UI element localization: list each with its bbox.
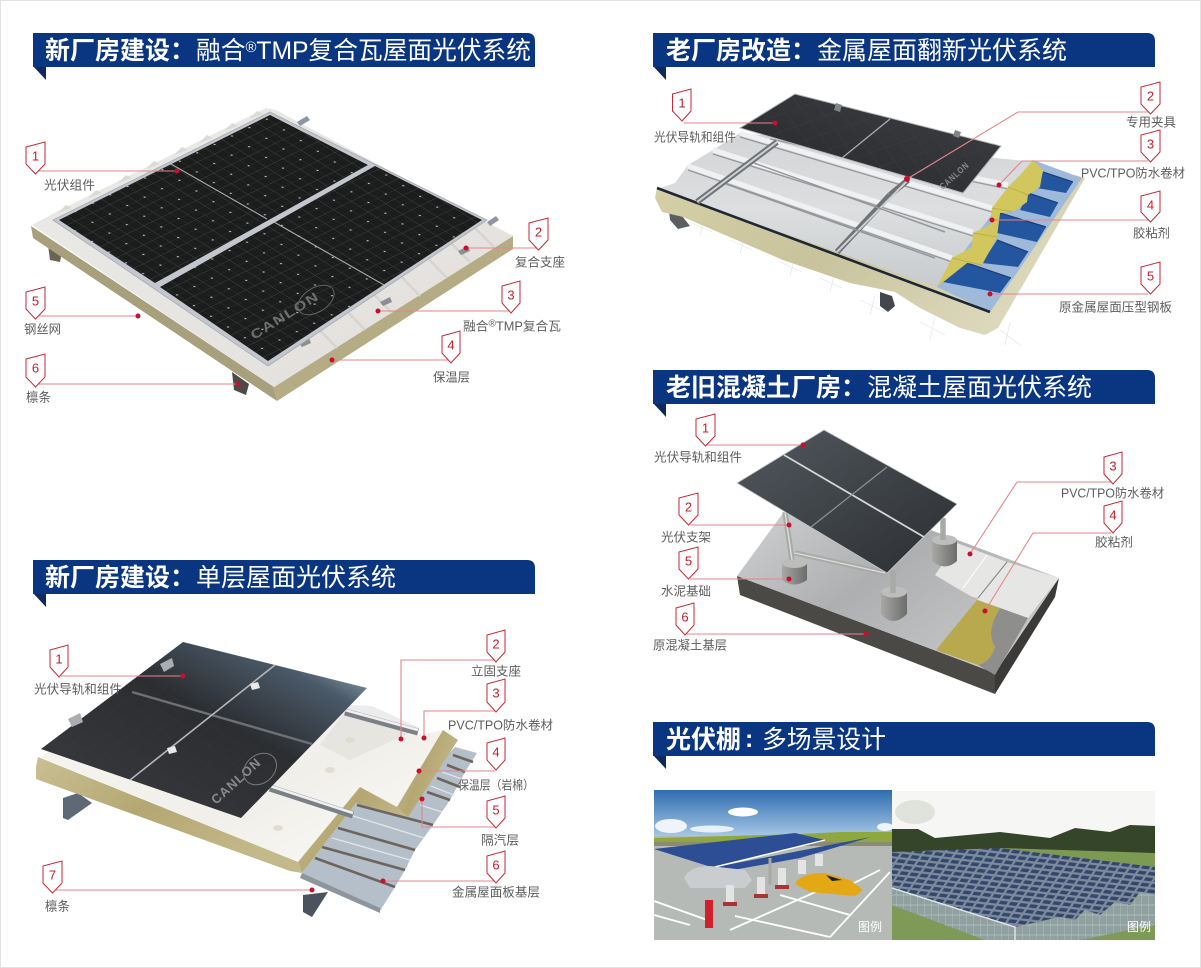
header: PV canopy scenes: 光伏棚 (666, 726, 741, 754)
callout 2: 复合支座: 2 (535, 224, 542, 240)
photo: solar carport: 图例 (858, 920, 882, 934)
roof diagram: composite tile with solar modules (31, 108, 513, 401)
callout 2: 光伏支架 (661, 493, 792, 544)
callout 6: 檩条: 檩条 (26, 390, 51, 404)
header: metal roof renovation: 老厂房改造： (666, 37, 816, 65)
callout 1: 光伏导轨和组件 (654, 414, 806, 464)
callout 2: 立固支座: 立固支座 (471, 664, 521, 678)
panel: PV canopy scenes (653, 722, 1155, 940)
callout 3: PVC/TPO防水卷材: 3 (1109, 458, 1117, 474)
panel: concrete roof (653, 370, 1164, 694)
header: TMP composite tile roof: TMP复合瓦屋面光伏系统 (256, 37, 531, 65)
callout 5: 隔汽层: 隔汽层 (481, 832, 519, 848)
callout 4: 胶粘剂: 胶粘剂 (1133, 226, 1170, 240)
callout 1: 光伏导轨和组件: 1 (55, 652, 63, 666)
header: TMP composite tile roof: 融合 (196, 37, 246, 65)
header: TMP composite tile roof (33, 33, 535, 80)
callout 5: 水泥基础: 水泥基础 (661, 584, 711, 598)
callout 1: 光伏导轨和组件 (34, 645, 186, 696)
roof diagram: metal roof retrofit (655, 94, 1085, 345)
callout 4: 胶粘剂 (990, 191, 1170, 240)
callout 3: PVC/TPO防水卷材 (422, 679, 553, 740)
callout 6: 金属屋面板基层: 金属屋面板基层 (452, 884, 540, 900)
roof diagram: composite tile with solar modules: CANLON (248, 288, 322, 343)
callout 1: 光伏导轨和组件: 光伏导轨和组件 (654, 130, 736, 144)
callout 1: 光伏组件: 1 (32, 148, 39, 164)
callout 3: PVC/TPO防水卷材: PVC/TPO防水卷材 (1061, 486, 1164, 500)
callout 3: 融合TMP复合瓦: 3 (507, 288, 515, 302)
header: concrete roof: 老旧混凝土厂房： (666, 374, 866, 402)
callout 2: 复合支座: 复合支座 (515, 254, 565, 270)
header: TMP composite tile roof: ® (245, 39, 256, 56)
callout 3: PVC/TPO防水卷材 (996, 130, 1185, 188)
callout 6: 原混凝土基层: 原混凝土基层 (653, 638, 727, 652)
callout 1: 光伏组件 (26, 142, 180, 192)
callout 7: 檩条 (43, 861, 314, 914)
header: PV canopy scenes: : (745, 725, 753, 753)
callout 1: 光伏导轨和组件: 光伏导轨和组件 (654, 450, 742, 464)
callout 7: 檩条: 7 (49, 868, 56, 882)
callout 4: 保温层（岩棉）: 4 (492, 744, 500, 760)
callout 4: 保温层（岩棉）: 保温层（岩棉） (458, 778, 534, 792)
callout 2: 立固支座 (398, 630, 521, 742)
header: concrete roof: 混凝土屋面光伏系统 (867, 374, 1092, 402)
callout 6: 檩条: 6 (32, 360, 39, 376)
callout 3: 融合TMP复合瓦: 融合 (463, 320, 488, 334)
roof diagram: single-layer membrane with rock wool (36, 642, 477, 917)
callout 6: 原混凝土基层: 6 (681, 610, 689, 624)
header: TMP composite tile roof: 新厂房建设： (45, 37, 195, 65)
callout 3: PVC/TPO防水卷材 (968, 452, 1164, 556)
callout 2: 立固支座: 2 (492, 636, 500, 652)
callout 3: 融合TMP复合瓦: TMP复合瓦 (496, 318, 561, 334)
callout 2: 光伏支架: 2 (685, 500, 692, 514)
callout 6: 檩条 (26, 354, 240, 404)
callout 6: 原混凝土基层 (653, 603, 868, 652)
callout 4: 胶粘剂: 4 (1109, 508, 1117, 522)
photo: solar greenhouse: 图例 (1127, 920, 1151, 934)
callout 3: PVC/TPO防水卷材: PVC/TPO防水卷材 (1081, 166, 1185, 180)
callout 5: 钢丝网 (24, 287, 140, 336)
callout 5: 隔汽层 (420, 796, 519, 848)
callout 2: 光伏支架: 光伏支架 (661, 530, 711, 544)
callout 1: 光伏导轨和组件: 1 (678, 96, 686, 110)
header: PV canopy scenes: 多场景设计 (762, 726, 886, 754)
panel: TMP composite tile roof (24, 33, 565, 404)
callout 5: 原金属屋面压型钢板: 原金属屋面压型钢板 (1059, 300, 1172, 314)
callout 4: 胶粘剂: 4 (1147, 198, 1154, 212)
callout 3: PVC/TPO防水卷材: 3 (1147, 136, 1154, 152)
callout 3: 融合TMP复合瓦 (376, 281, 561, 334)
callout 4: 保温层: 4 (447, 338, 455, 352)
callout 4: 保温层（岩棉） (416, 738, 534, 792)
callout 2: 专用夹具: 专用夹具 (1126, 114, 1176, 130)
header: PV canopy scenes (653, 722, 1155, 769)
callout 3: PVC/TPO防水卷材: PVC/TPO防水卷材 (448, 718, 553, 732)
callout 7: 檩条: 檩条 (45, 898, 70, 914)
callout 4: 胶粘剂 (982, 501, 1133, 614)
callout 5: 水泥基础 (661, 547, 792, 598)
callout 1: 光伏组件: 光伏组件 (44, 178, 95, 192)
roof diagram: single-layer membrane with rock wool: CANLON (208, 755, 264, 807)
callout 1: 光伏导轨和组件: 光伏导轨和组件 (34, 682, 122, 696)
roof diagram: concrete base with tilted solar array (737, 430, 1059, 694)
header: single-layer roof (33, 560, 535, 607)
header: concrete roof (653, 370, 1155, 417)
panel: metal roof renovation (653, 33, 1185, 345)
callout 4: 保温层: 保温层 (433, 370, 470, 384)
callout 6: 金属屋面板基层: 6 (492, 858, 500, 872)
callout 3: 融合TMP复合瓦: ® (488, 318, 497, 330)
callout 3: PVC/TPO防水卷材: 3 (492, 686, 500, 700)
header: single-layer roof: 新厂房建设： (45, 564, 195, 592)
roof diagram: metal roof retrofit: CANLON (938, 160, 971, 191)
panel: single-layer roof (33, 560, 553, 917)
callout 5: 原金属屋面压型钢板: 5 (1147, 268, 1154, 284)
callout 5: 钢丝网: 5 (32, 294, 39, 308)
header: single-layer roof: 单层屋面光伏系统 (196, 564, 396, 592)
callout 5: 原金属屋面压型钢板 (988, 262, 1172, 314)
callout 5: 隔汽层: 5 (492, 802, 500, 818)
callout 6: 金属屋面板基层 (380, 851, 540, 900)
callout 5: 钢丝网: 钢丝网 (24, 322, 61, 336)
callout 1: 光伏导轨和组件 (654, 89, 778, 144)
callout 2: 专用夹具 (904, 82, 1176, 182)
header: metal roof renovation (653, 33, 1155, 80)
header: metal roof renovation: 金属屋面翻新光伏系统 (817, 37, 1067, 65)
callout 2: 复合支座 (464, 218, 565, 270)
photo: solar carport (654, 790, 893, 940)
callout 5: 水泥基础: 5 (685, 554, 692, 568)
callout 2: 专用夹具: 2 (1147, 88, 1154, 104)
callout 1: 光伏导轨和组件: 1 (702, 420, 709, 436)
photo: solar greenhouse (892, 791, 1155, 940)
callout 4: 胶粘剂: 胶粘剂 (1095, 534, 1133, 550)
callout 4: 保温层 (330, 331, 470, 384)
